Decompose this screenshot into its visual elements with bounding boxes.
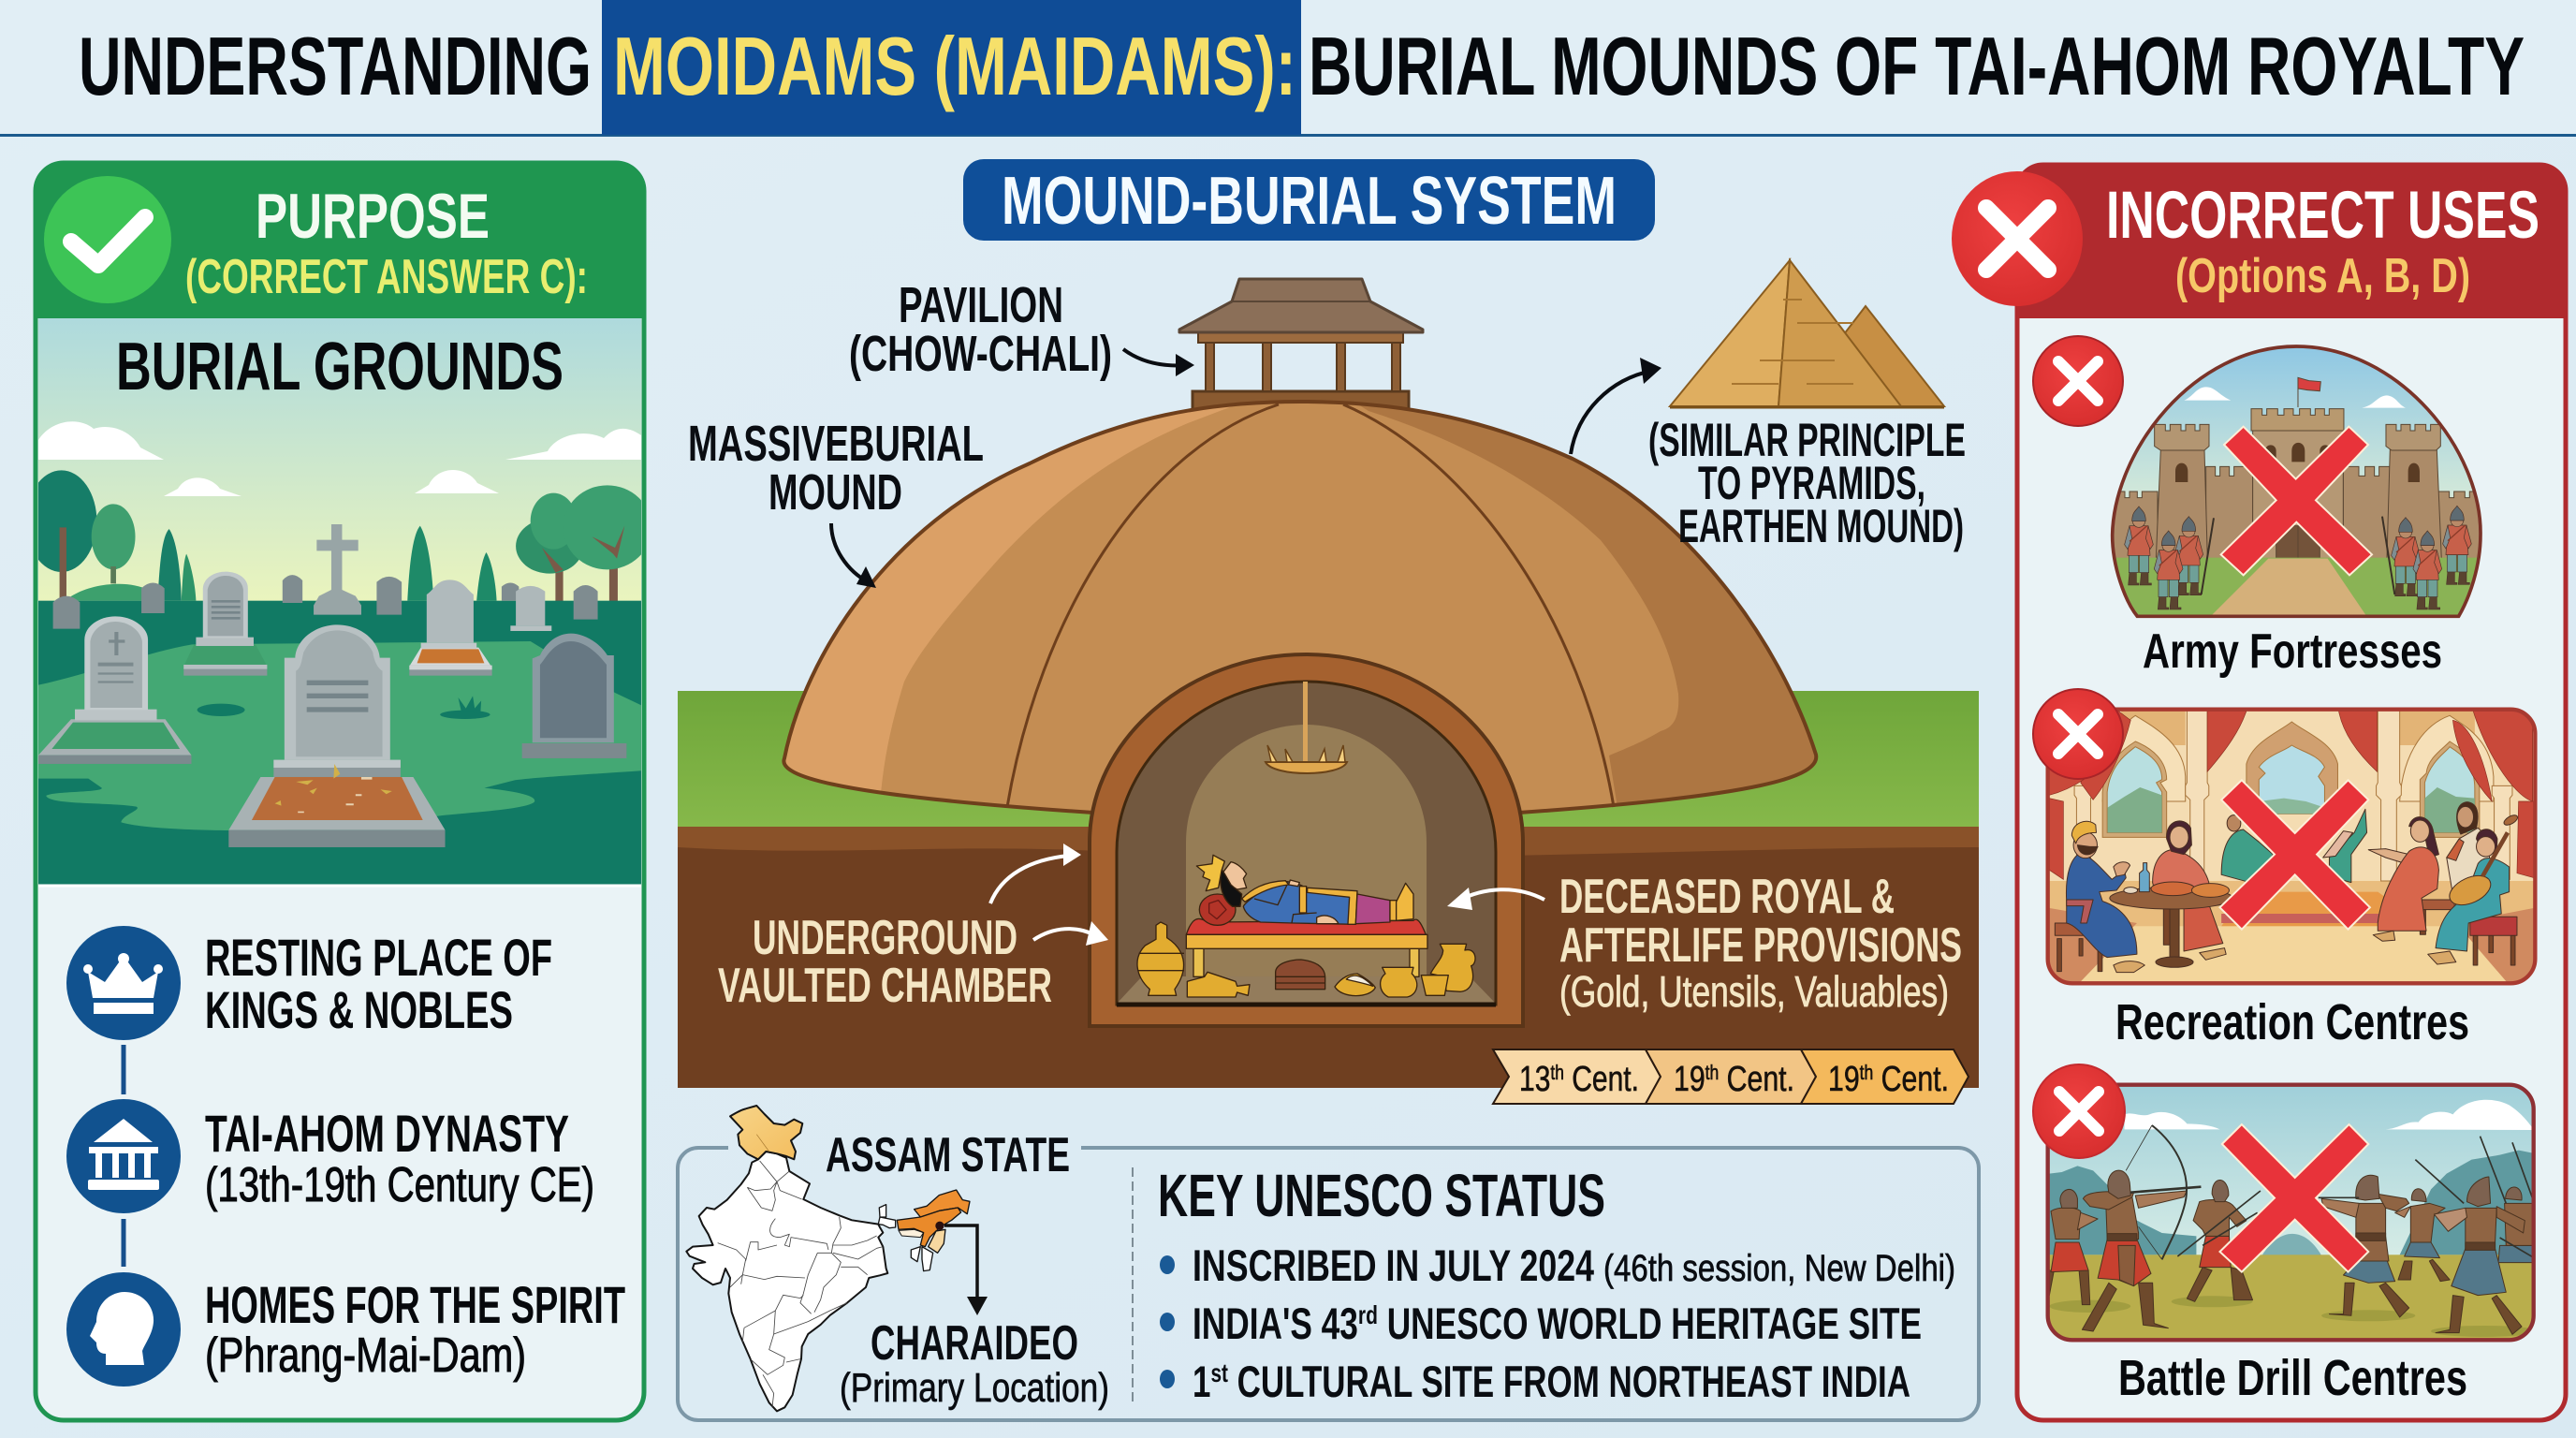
label: pavilion: PAVILION xyxy=(899,277,1063,333)
label: deceased royal and provisions xyxy=(1559,870,1962,1016)
label: Charaideo xyxy=(840,1316,1109,1411)
icon: big red cross xyxy=(1952,171,2083,306)
timeline chevrons xyxy=(1493,1049,1969,1104)
diagram: ground and soil xyxy=(678,691,1979,1088)
purpose header band xyxy=(34,163,646,318)
map of India xyxy=(686,1106,970,1411)
timeline chevrons: th xyxy=(1860,1061,1873,1084)
label: pavilion: (CHOW-CHALI) xyxy=(849,326,1112,382)
illustration: graveyard xyxy=(26,318,651,886)
label: deceased royal and provisions: AFTERLIFE PROVISIONS xyxy=(1559,918,1962,973)
timeline chevrons: th xyxy=(1550,1061,1564,1084)
point: homes for the spirit: (Phrang-Mai-Dam) xyxy=(205,1328,526,1383)
bullet: inscribed: (46th session, New Delhi) xyxy=(1603,1248,1955,1289)
label: similar principle: (SIMILAR PRINCIPLE xyxy=(1648,414,1966,466)
illustration: burial mound xyxy=(768,398,1835,819)
correct answer subheading: (CORRECT ANSWER C): xyxy=(185,250,588,304)
warrior middle xyxy=(2187,1180,2253,1301)
bullet: first cultural site: st xyxy=(1210,1358,1228,1387)
panel: location and unesco status xyxy=(678,1106,1979,1420)
icon: crown xyxy=(66,926,181,1040)
stone left front xyxy=(38,616,191,764)
label: similar principle: TO PYRAMIDS, xyxy=(1698,457,1925,509)
label: deceased royal and provisions: (Gold, Utensils, Valuables) xyxy=(1559,967,1949,1016)
title bar: MOIDAMS (MAIDAMS): xyxy=(613,20,1296,112)
point: resting place: RESTING PLACE OF xyxy=(205,928,552,987)
point: dynasty: TAI-AHOM DYNASTY xyxy=(205,1104,569,1163)
distant headstones xyxy=(53,575,598,629)
timeline chevrons: Cent. xyxy=(1719,1060,1794,1099)
timeline chevrons: 19 xyxy=(1828,1060,1867,1099)
illustration: pyramids xyxy=(1670,260,1944,407)
afterlife provisions xyxy=(1137,922,1475,997)
illustration: army fortress xyxy=(2106,342,2490,620)
options subheading: (Options A, B, D) xyxy=(2175,249,2470,303)
icon: temple xyxy=(66,1099,181,1213)
bullet: first cultural site: 1 xyxy=(1193,1357,1217,1406)
illustration: vaulted chamber xyxy=(1090,654,1523,1026)
connector lines xyxy=(122,1045,125,1267)
bench right xyxy=(2415,900,2454,934)
warrior far right xyxy=(2498,1187,2534,1263)
bullet: 43rd site: UNESCO WORLD HERITAGE SITE xyxy=(1378,1299,1922,1348)
burial grounds heading: BURIAL GROUNDS xyxy=(116,330,564,404)
arrow: pavilion xyxy=(1123,349,1194,376)
label: army fortresses: Army Fortresses xyxy=(2143,624,2442,679)
label: underground vaulted chamber: UNDERGROUND xyxy=(753,911,1017,965)
label: massive burial mound: MOUND xyxy=(768,464,902,521)
icon: head xyxy=(66,1272,181,1387)
stone dark xyxy=(522,634,626,758)
man standing right xyxy=(2447,802,2491,895)
illustration: pavilion xyxy=(1179,279,1423,414)
guests behind the cross xyxy=(2221,809,2367,884)
bullet: inscribed xyxy=(1160,1240,1955,1290)
warrior right archer xyxy=(2321,1175,2409,1317)
label: Assam state: ASSAM STATE xyxy=(826,1128,1070,1182)
bullet: first cultural site xyxy=(1160,1357,1910,1406)
label: similar principle: EARTHEN MOUND) xyxy=(1678,500,1964,552)
lower wall and floor xyxy=(2046,881,2537,928)
seated man in blue xyxy=(2055,821,2144,973)
panel: incorrect uses xyxy=(1952,163,2567,1420)
arrow: to pyramids xyxy=(1571,358,1661,454)
illustration: recreation centre xyxy=(2046,708,2537,985)
label: massive burial mound xyxy=(688,416,984,521)
keep xyxy=(2253,431,2343,559)
arrow: Charaideo xyxy=(944,1225,988,1315)
bullet: 43rd site: INDIA'S 43 xyxy=(1193,1299,1413,1348)
label: underground vaulted chamber xyxy=(718,911,1052,1013)
bows, arrows and spears xyxy=(2126,1125,2534,1259)
timeline chevrons: Cent. xyxy=(1564,1060,1639,1099)
bullet: first cultural site: CULTURAL SITE FROM NORTHEAST INDIA xyxy=(1228,1357,1910,1406)
ground xyxy=(2115,558,2477,614)
stone main xyxy=(228,624,446,847)
arches and windows xyxy=(2074,708,2512,883)
mound burial heading: MOUND-BURIAL SYSTEM xyxy=(1002,164,1617,239)
panel: purpose xyxy=(26,163,651,1420)
timeline chevrons: 13 xyxy=(1519,1060,1559,1099)
incorrect header band xyxy=(2015,163,2567,318)
badge: army xyxy=(2033,336,2123,426)
label: pavilion xyxy=(849,277,1112,382)
curtains xyxy=(2046,711,2534,879)
title bar: UNDERSTANDING xyxy=(79,20,592,112)
badge: battle xyxy=(2033,1064,2125,1158)
label: Charaideo: (Primary Location) xyxy=(840,1365,1109,1411)
bullet: inscribed: INSCRIBED IN JULY 2024 xyxy=(1193,1240,1594,1290)
label: massive burial mound: MASSIVEBURIAL xyxy=(688,416,984,472)
label: underground vaulted chamber: VAULTED CHAMBER xyxy=(718,959,1052,1013)
soldiers xyxy=(2125,506,2471,609)
title bar xyxy=(0,0,2576,137)
warrior back left xyxy=(2049,1189,2098,1305)
background trees and horizon xyxy=(26,470,651,602)
woman right xyxy=(2368,817,2438,941)
warrior archer xyxy=(2082,1170,2187,1331)
seated woman left xyxy=(2153,821,2226,960)
key UNESCO heading: KEY UNESCO STATUS xyxy=(1158,1162,1605,1229)
label: Charaideo: CHARAIDEO xyxy=(871,1316,1078,1371)
central platform xyxy=(2221,892,2400,926)
stone back right xyxy=(409,580,492,676)
label: deceased royal and provisions: DECEASED ROYAL & xyxy=(1559,870,1895,924)
woman with lute xyxy=(2428,814,2519,965)
table xyxy=(2110,863,2233,967)
label: recreation centres: Recreation Centres xyxy=(2115,994,2469,1050)
timeline chevrons: th xyxy=(1705,1061,1719,1084)
towers xyxy=(2156,449,2207,559)
timeline chevrons: Cent. xyxy=(1873,1060,1949,1099)
arrow: mound xyxy=(831,523,876,588)
point: dynasty: (13th-19th Century CE) xyxy=(205,1158,594,1212)
timeline chevrons: 19 xyxy=(1674,1060,1713,1099)
illustration: battle drill xyxy=(2046,1083,2538,1342)
icon: green check xyxy=(44,176,171,303)
chandelier xyxy=(1266,682,1347,773)
bullet: 43rd site xyxy=(1160,1299,1922,1348)
cross monument xyxy=(314,524,361,615)
warrior front right xyxy=(2434,1177,2525,1334)
label: similar principle xyxy=(1648,414,1966,552)
label: battle drill centres: Battle Drill Centres xyxy=(2118,1350,2467,1406)
point: homes for the spirit: HOMES FOR THE SPIRIT xyxy=(205,1275,625,1334)
arrows: chamber xyxy=(990,844,1108,946)
bullet: 43rd site: rd xyxy=(1358,1300,1378,1329)
warrior back right xyxy=(2395,1189,2450,1282)
badge: recreation xyxy=(2033,689,2123,779)
arrow: royal xyxy=(1447,888,1544,910)
columns xyxy=(2186,708,2209,881)
outer walls xyxy=(2114,491,2159,558)
stone back left xyxy=(183,572,267,676)
bed with royal figure xyxy=(1186,855,1427,976)
point: resting place: KINGS & NOBLES xyxy=(205,980,513,1039)
purpose heading: PURPOSE xyxy=(256,181,490,252)
